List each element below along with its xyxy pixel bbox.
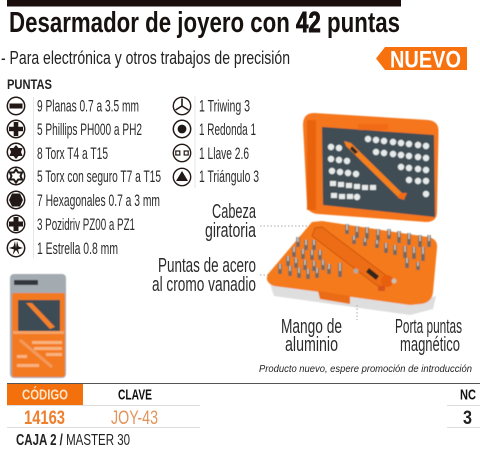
icon: pozidriv (7, 215, 25, 233)
label: redonda: 1 Redonda 1 (199, 121, 256, 139)
value: clave: JOY-43 (111, 407, 158, 429)
product thumbnail: packaging (10, 274, 66, 378)
callout: mango de aluminio: aluminio (285, 334, 338, 356)
callout: cabeza giratoria: giratoria (205, 220, 257, 242)
callout: mango de aluminio (281, 305, 357, 356)
header: clave: CLAVE (118, 386, 152, 404)
label: pozidriv: 3 Pozidriv PZ00 a PZ1 (37, 216, 135, 234)
icon: estrella (7, 239, 25, 257)
callout: puntas de acero (152, 255, 270, 296)
callout: cabeza giratoria: Cabeza (212, 201, 257, 223)
case orange tray (267, 221, 437, 305)
header: codigo (7, 384, 83, 405)
product photo: open bit case (267, 113, 439, 315)
value: codigo: 14163 (24, 407, 65, 429)
label: hexagonales: 7 Hexagonales 0.7 a 3 mm (37, 192, 160, 210)
label: estrella: 1 Estrella 0.8 mm (37, 240, 118, 258)
callout: porta puntas magnetico (395, 316, 462, 356)
label: phillips: 5 Phillips PH000 a PH2 (37, 121, 142, 139)
callout: cabeza giratoria (205, 201, 310, 242)
icon: triangulo (173, 168, 191, 186)
rotating handle (312, 227, 388, 288)
tip list left (7, 97, 161, 258)
bit holes (328, 136, 429, 200)
label: triangulo: 1 Triángulo 3 (199, 168, 259, 186)
label: llave: 1 Llave 2.6 (199, 145, 249, 163)
icon: phillips (7, 120, 25, 138)
icon: torx con seguro (7, 167, 25, 185)
callout: puntas de acero: Puntas de acero (158, 255, 256, 277)
packaging info: CAJA 2 / MASTER 30 (16, 432, 130, 449)
label: torx: 8 Torx T4 a T15 (37, 145, 108, 163)
icon: triwing (173, 97, 191, 115)
icon: llave (173, 144, 191, 162)
callout: puntas de acero: al cromo vanadio (152, 274, 256, 296)
bits (280, 224, 429, 279)
value: nc: 3 (463, 407, 472, 429)
subtitle: - Para electrónica y otros trabajos de precisión (1, 47, 290, 68)
case lid (303, 113, 439, 222)
label: planas: 9 Planas 0.7 a 3.5 mm (37, 98, 139, 116)
callout: mango de aluminio: Mango de (281, 316, 342, 338)
icon: redonda (173, 120, 191, 138)
heading: puntas: PUNTAS (7, 77, 52, 92)
table (7, 384, 480, 429)
tip list right (173, 96, 259, 188)
icon: torx (7, 143, 25, 161)
icon: plana (7, 97, 25, 115)
label: triwing: 1 Triwing 3 (199, 98, 250, 116)
title: Desarmador de joyero con 42 puntas (9, 7, 400, 39)
case white base (270, 284, 436, 315)
label: torx con seguro: 5 Torx con seguro T7 a T15 (37, 168, 161, 186)
header: codigo: CÓDIGO (22, 386, 68, 404)
top black bar (7, 0, 401, 6)
icon: hexagonal (7, 191, 25, 209)
badge: nuevo: NUEVO (390, 46, 461, 74)
